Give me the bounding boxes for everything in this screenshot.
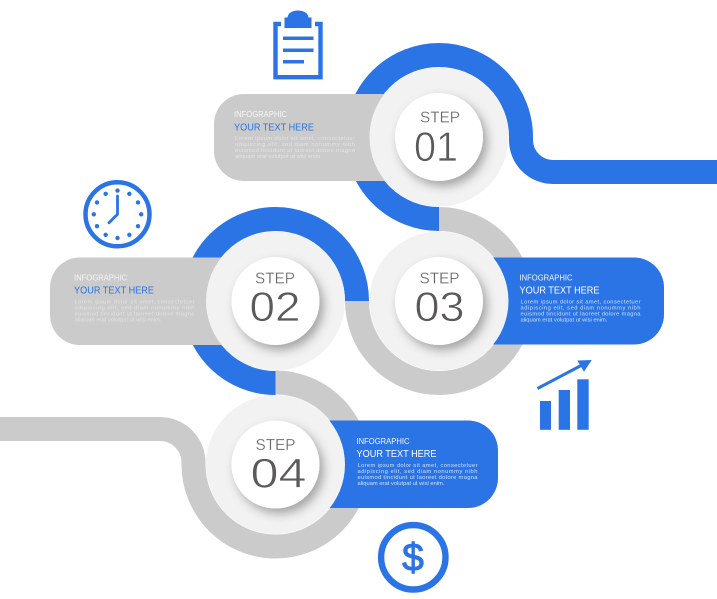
body text: [520, 300, 641, 324]
step label: STEP: [420, 270, 460, 288]
panel: step 1: [214, 68, 508, 206]
track: grey ring around step 3: [357, 219, 521, 383]
icon: growth chart: [538, 360, 592, 430]
panel background: [214, 94, 414, 181]
outer circle: [370, 232, 508, 370]
body text: [235, 136, 356, 160]
outer circle: [206, 395, 345, 534]
body text: adipiscing elit, sed diam nonummy nibh: [520, 306, 640, 312]
body text: Lorem ipsum dolor sit amet, consectetuer: [235, 136, 355, 142]
body text: euismod tincidunt ut laoreet dolore magna: [235, 148, 356, 154]
panel background: [298, 420, 498, 508]
outer circle: [370, 68, 508, 206]
label: INFOGRAPHIC: [520, 274, 573, 282]
track: blue path around step 1 to right edge: [357, 55, 717, 219]
icon: clipboard: [276, 10, 320, 77]
body text: aliquam erat volutpat ut wisi enim.: [74, 318, 162, 324]
inner circle: [232, 420, 320, 508]
panel: step 2: [50, 232, 345, 370]
inner circle: [395, 93, 483, 181]
step label: STEP: [256, 437, 296, 454]
outer circle: [206, 232, 345, 370]
heading: YOUR TEXT HERE: [74, 286, 154, 296]
heading: YOUR TEXT HERE: [234, 122, 314, 134]
step number: 04: [250, 450, 306, 496]
inner circle: [395, 257, 483, 345]
body text: adipiscing elit, sed diam nonummy nibh: [74, 306, 194, 312]
body text: Lorem ipsum dolor sit amet, consectetuer: [74, 300, 195, 306]
step label: STEP: [255, 270, 295, 288]
label: INFOGRAPHIC: [234, 110, 287, 119]
body text: aliquam erat volutpat ut wisi enim.: [520, 318, 608, 324]
heading: YOUR TEXT HERE: [356, 449, 437, 460]
icon: clock: [86, 182, 150, 246]
panel: step 3: [370, 232, 664, 370]
panel background: [50, 258, 250, 345]
heading: YOUR TEXT HERE: [520, 286, 600, 296]
track: grey path around step 4 to left edge: [0, 382, 358, 546]
icon: dollar coin: [381, 525, 445, 590]
body text: [74, 300, 195, 324]
label: INFOGRAPHIC: [74, 274, 127, 282]
body text: aliquam erat volutpat ut wisi enim.: [358, 481, 445, 487]
body text: euismod tincidunt ut laoreet dolore magna: [358, 475, 478, 481]
body text: aliquam erat volutpat ut wisi enim.: [235, 154, 322, 160]
body text: [358, 463, 478, 487]
panel background: [464, 258, 664, 344]
step number: 01: [414, 123, 458, 170]
body text: Lorem ipsum dolor sit amet, consectetuer: [358, 463, 478, 469]
body text: euismod tincidunt ut laoreet dolore magna: [520, 312, 641, 318]
step number: 02: [250, 283, 300, 330]
track: blue ring around step 2: [194, 219, 357, 383]
panel: step 4: [206, 395, 498, 534]
step number: 03: [414, 283, 464, 330]
body text: adipiscing elit, sed diam nonummy nibh: [235, 142, 355, 148]
body text: adipiscing elit, sed diam nonummy nibh: [358, 469, 478, 475]
body text: Lorem ipsum dolor sit amet, consectetuer: [520, 300, 641, 306]
label: INFOGRAPHIC: [356, 437, 410, 446]
icon: dollar coin: $: [402, 536, 424, 580]
body text: euismod tincidunt ut laoreet dolore magna: [74, 312, 195, 318]
inner circle: [232, 257, 320, 345]
step label: STEP: [420, 110, 460, 126]
